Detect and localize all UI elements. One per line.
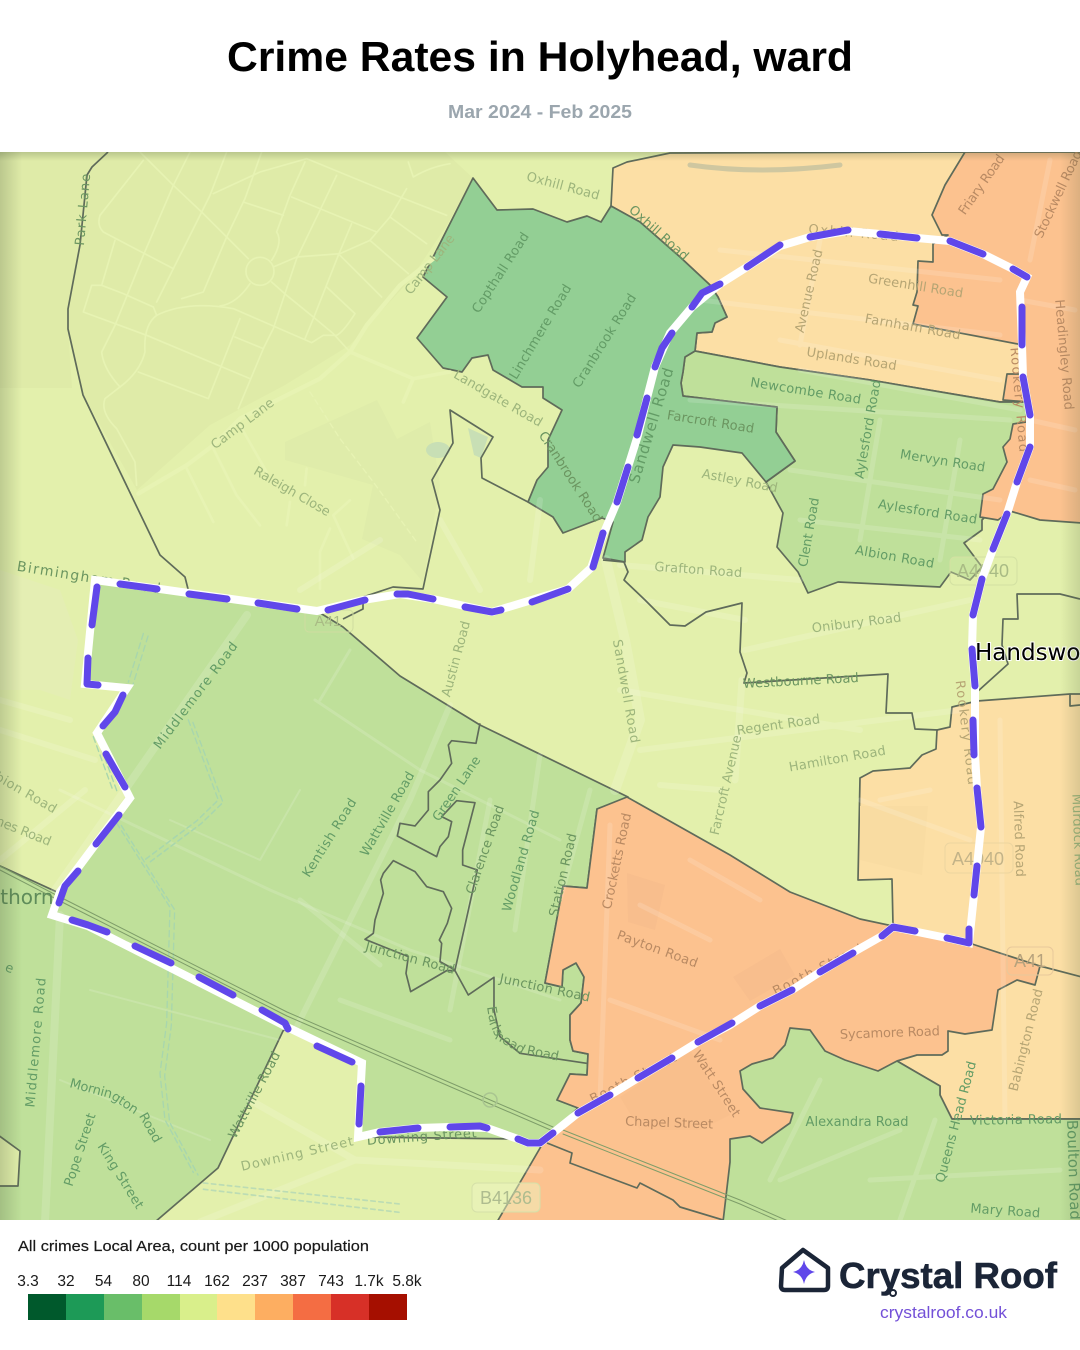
- region: green Holyhead central: [52, 580, 628, 1143]
- website url: crystalroof.co.uk: [880, 1304, 1008, 1322]
- road name labels: Oxhill Road: [808, 222, 899, 245]
- road name labels: Farcroft Avenue: [708, 734, 745, 837]
- road name labels: Raleigh Close: [251, 464, 333, 520]
- road name labels: Albion Road: [854, 543, 935, 572]
- road name labels: King Street: [94, 1140, 146, 1212]
- road name labels: Aylesford Road: [877, 497, 978, 528]
- road name labels: Aylesford Road: [852, 379, 885, 480]
- road name labels: Uplands Road: [805, 345, 898, 374]
- legend scale values: 80: [132, 1273, 150, 1290]
- road name labels: Middlemore Road: [23, 977, 50, 1108]
- road name labels: Payton Road: [615, 928, 700, 971]
- road name labels: Mervyn Road: [899, 447, 986, 476]
- road name labels: Greenhill Road: [867, 272, 964, 301]
- legend scale values: 1.7k: [354, 1273, 384, 1290]
- legend scale values: 32: [57, 1273, 75, 1290]
- region: dark green Copthall and Farcroft: [417, 178, 795, 562]
- region: green south west: [0, 865, 287, 1222]
- road name labels: Victoria Road: [970, 1112, 1062, 1129]
- road name labels: Newcombe Road: [749, 375, 862, 408]
- road name labels: Cranbrook Road: [535, 429, 605, 525]
- road name labels: Watt Street: [689, 1048, 743, 1120]
- road name labels: Crocketts Road: [600, 812, 635, 911]
- road name labels: Westbourne Road: [743, 671, 859, 692]
- region: orange north east: [913, 152, 1080, 523]
- brand name: Crystal Roof: [839, 1255, 1058, 1296]
- road shields: [305, 557, 1053, 1212]
- road name labels: Earlshead Road: [487, 1006, 559, 1060]
- logo: Crystal Roof: [781, 1250, 1058, 1322]
- road name labels: Astley Road: [700, 467, 779, 496]
- icon: house with star: [781, 1250, 828, 1290]
- road name labels: Copthall Road: [469, 230, 533, 316]
- road name labels: Alfred Road: [1010, 801, 1027, 877]
- road name labels: Austin Road: [439, 619, 474, 699]
- road name labels: Avenue Road: [793, 248, 826, 334]
- road name labels: Junction Road: [363, 939, 456, 978]
- road name labels: Oxhill Road: [625, 203, 691, 264]
- road name labels: Sandwell Road: [625, 366, 677, 486]
- road name labels: Chapel Street: [625, 1114, 713, 1133]
- road name labels: Rookery Road: [952, 680, 979, 786]
- road name labels: Booth Street: [770, 940, 866, 999]
- road name labels: Kentish Road: [300, 796, 360, 880]
- title: Crime Rates in Holyhead, ward: [227, 33, 853, 80]
- legend colour ramp: [28, 1294, 407, 1320]
- road name labels: Junction Road: [497, 971, 591, 1005]
- road name labels: Clent Road: [796, 497, 823, 568]
- road name labels: Middlemore Road: [151, 639, 241, 752]
- road network: [0, 152, 1075, 1226]
- road name labels: Alexandra Road: [806, 1115, 908, 1130]
- panel: choropleth map: [0, 152, 1080, 1220]
- road name labels: Grafton Road: [654, 560, 743, 581]
- road name labels: Queens Head Road: [933, 1060, 980, 1184]
- road name labels: Onibury Road: [811, 611, 902, 636]
- ward boundaries: [68, 152, 1080, 1220]
- road name labels: Green Lane: [430, 754, 484, 824]
- road name labels: Sycamore Road: [840, 1024, 940, 1043]
- subtitle: date range: Mar 2024 - Feb 2025: [448, 102, 632, 122]
- legend scale values: 387: [280, 1273, 306, 1290]
- road name labels: Park Lane: [73, 173, 94, 246]
- road shields: A41: [1014, 951, 1046, 971]
- road name labels: Camp Lane: [208, 396, 277, 453]
- road name labels: Hamilton Road: [788, 744, 887, 775]
- road name labels: Birmingham Road: [16, 559, 161, 597]
- road name labels: Oxhill Road: [525, 170, 601, 204]
- road name labels: Downing Street: [239, 1134, 355, 1175]
- legend scale values: 5.8k: [392, 1273, 422, 1290]
- road name labels: Rookery Road: [1006, 347, 1031, 453]
- road name labels: Landgate Road: [451, 367, 545, 430]
- road name labels: Booth Street: [588, 1051, 679, 1107]
- road name labels: Farnham Road: [864, 312, 962, 343]
- region: green Alexandra: [723, 1015, 1080, 1222]
- road name labels: Camp Lane: [402, 232, 458, 298]
- legend: [17, 1238, 422, 1320]
- road name labels: Mary Road: [970, 1202, 1041, 1221]
- road name labels: Station Road: [547, 832, 580, 918]
- road name labels: Friary Road: [956, 152, 1008, 218]
- road name labels: Cranbrook Road: [570, 291, 640, 391]
- road name labels: Sandwell Road: [609, 638, 642, 744]
- road shields: A4040: [952, 849, 1004, 869]
- road name labels: Woodland Road: [500, 809, 543, 914]
- road shields: A41: [315, 613, 341, 630]
- road name labels: e: [3, 960, 16, 977]
- road name labels: Babington Road: [1007, 987, 1047, 1093]
- legend scale values: [17, 1273, 422, 1290]
- road name labels: Farcroft Road: [666, 408, 755, 437]
- region: orange south: [497, 797, 1040, 1222]
- road name labels: Downing Street: [366, 1126, 477, 1149]
- legend scale values: 237: [242, 1273, 268, 1290]
- road name labels: Wattville Road: [358, 769, 418, 859]
- map edge shading: [0, 152, 1080, 1220]
- legend scale values: 3.3: [17, 1273, 39, 1290]
- road name labels: Mornington Road: [70, 1078, 162, 1142]
- legend title: All crimes Local Area, count per 1000 population: [18, 1238, 369, 1255]
- road name labels: Linchmere Road: [507, 282, 575, 382]
- legend scale values: 162: [204, 1273, 230, 1290]
- legend scale values: 743: [318, 1273, 344, 1290]
- road name labels: Regent Road: [736, 712, 821, 739]
- region: light orange north: [611, 152, 1040, 402]
- region: light orange south east: [858, 694, 1080, 1119]
- road name labels: Headingley Road: [1051, 299, 1076, 411]
- region: green Newcombe and Aylesford: [681, 351, 1030, 593]
- buildings and water patches: [426, 428, 860, 820]
- road name labels: Pope Street: [62, 1111, 100, 1188]
- road shields: A4040: [957, 561, 1009, 581]
- ward route outline and dashes: [52, 230, 1030, 1143]
- road shields: B4136: [480, 1188, 532, 1208]
- road name labels: Wattville Road: [226, 1049, 284, 1141]
- legend scale values: 114: [167, 1273, 192, 1290]
- legend scale values: 54: [95, 1273, 112, 1290]
- road name labels: Clarence Road: [463, 803, 508, 896]
